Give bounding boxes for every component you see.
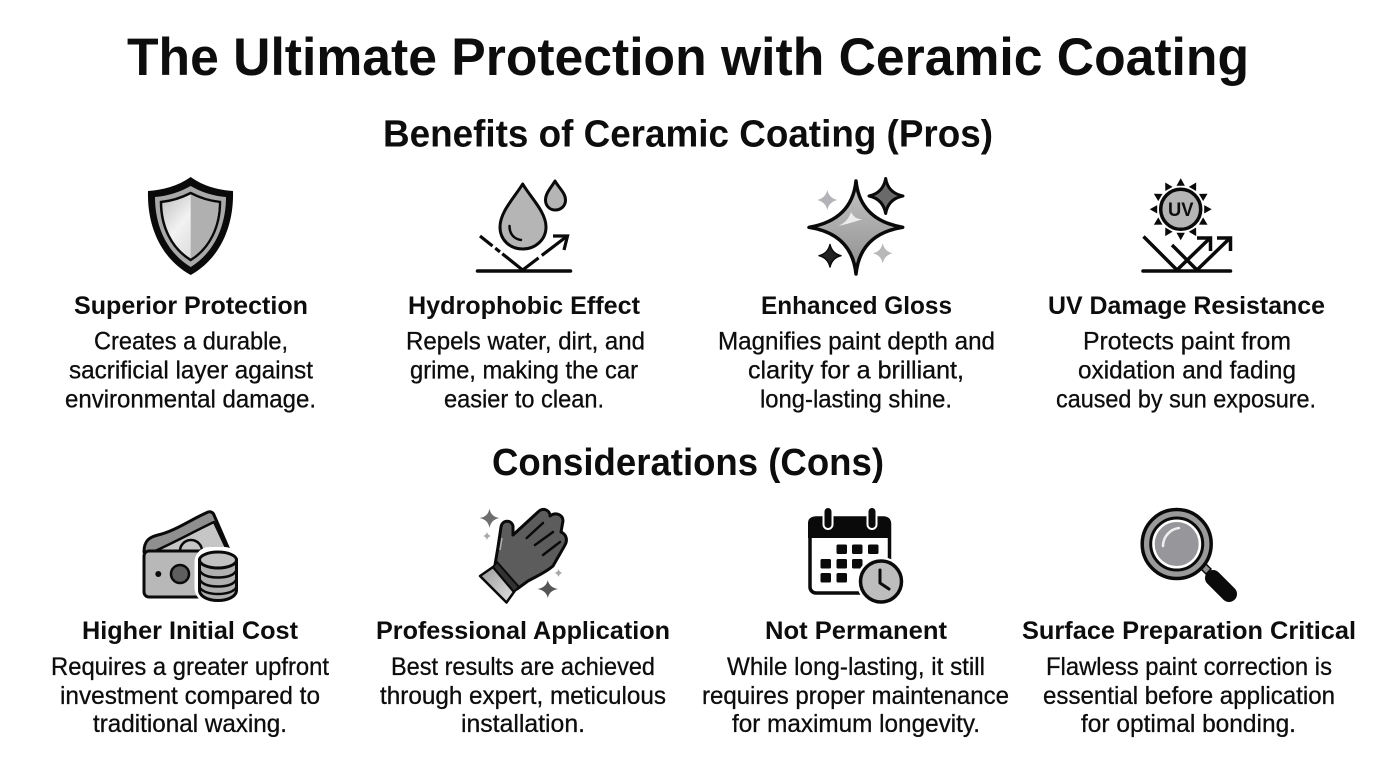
icon: sparkles [809,178,903,274]
text: cost description: Requires a greater upfront [51,653,329,681]
panel: not permanent [702,506,1009,738]
label: professional application: Professional Application [376,617,670,645]
text: preparation description: for optimal bonding. [1081,710,1296,738]
text: gloss description: long-lasting shine. [760,386,952,414]
label: higher initial cost: Higher Initial Cost [82,617,299,645]
text: permanence description: requires proper maintenance [702,682,1009,710]
label: surface preparation critical: Surface Preparation Critical [1022,617,1356,645]
text: gloss description: Magnifies paint depth and [718,328,995,356]
text: cost description: investment compared to [60,682,320,710]
text: superior protection description: sacrificial layer against [69,356,313,384]
panel: hydrophobic effect [406,181,645,414]
text: application description: installation. [461,710,585,738]
text: permanence description [702,653,1009,738]
heading: considerations: Considerations (Cons) [492,442,884,484]
text: uv description: Protects paint from [1083,328,1291,356]
text: preparation description: Flawless paint correction is [1046,653,1332,681]
text: hydrophobic description: Repels water, dirt, and [406,328,645,356]
text: hydrophobic description: grime, making the car [410,356,638,384]
text: hydrophobic description: easier to clean. [444,386,604,414]
text: preparation description: essential before application [1043,682,1335,710]
text: application description: Best results are achieved [391,653,655,681]
icon: uv sun with reflected rays: UV [1168,200,1194,221]
label: hydrophobic effect: Hydrophobic Effect [408,292,641,320]
label: not permanent: Not Permanent [765,617,948,645]
text: gloss description [718,328,995,414]
panel: professional application [376,508,670,738]
panel: surface preparation critical [1022,510,1356,738]
text: superior protection description [65,328,316,414]
panel: enhanced gloss [718,178,995,414]
text: uv description [1056,328,1316,414]
text: permanence description: While long-lasting, it still [727,653,985,681]
text: superior protection description: Creates a durable, [94,328,288,356]
text: uv description: oxidation and fading [1078,356,1296,384]
heading: benefits: Benefits of Ceramic Coating (Pros) [383,114,993,156]
text: cost description [51,653,329,738]
text: gloss description: clarity for a brilliant, [748,356,964,384]
text: superior protection description: environmental damage. [65,386,316,414]
panel: superior protection [65,177,316,414]
icon: calendar with clock [808,506,906,606]
icon: uv sun with reflected rays [1143,178,1230,271]
text: cost description: traditional waxing. [93,710,287,738]
label: superior protection: Superior Protection [74,292,308,320]
panel: uv damage resistance [1048,178,1325,414]
text: hydrophobic description [406,328,645,414]
panel: higher initial cost [51,512,329,738]
text: permanence description: for maximum longevity. [732,710,980,738]
text: preparation description [1043,653,1335,738]
text: uv description: caused by sun exposure. [1056,386,1316,414]
icon: shield [148,177,233,275]
label: enhanced gloss: Enhanced Gloss [761,292,952,320]
text: application description: through expert, meticulous [380,682,666,710]
label: uv damage resistance: UV Damage Resistance [1048,292,1325,320]
text: application description [380,653,666,738]
icon: banknotes and coins [144,512,240,603]
icon: magnifying glass [1142,510,1229,594]
icon: gloved hand with sparkles [480,508,566,602]
title: The Ultimate Protection with Ceramic Coating [127,28,1249,87]
icon: water drops [478,181,570,271]
